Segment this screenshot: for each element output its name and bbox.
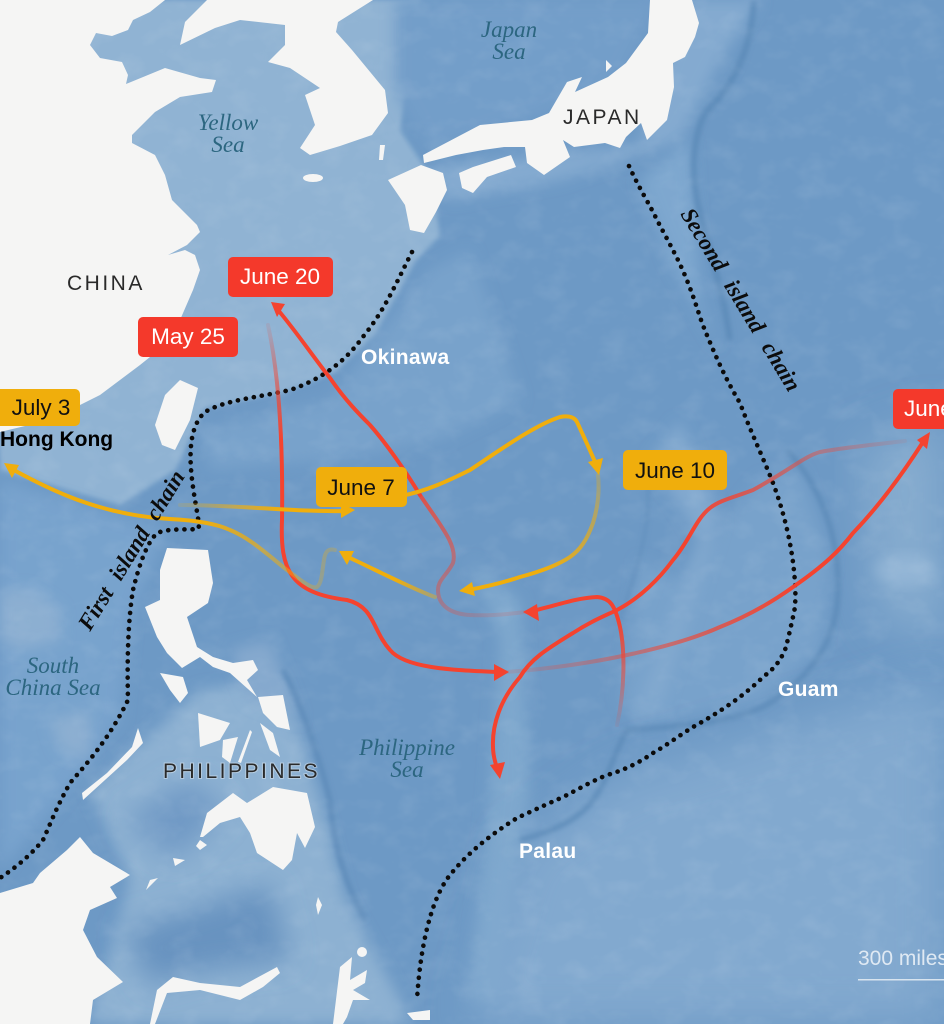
landmass: Taiwan <box>155 380 198 450</box>
tag: June 20: June 20 <box>240 264 320 289</box>
tag: June 7: June 7 <box>327 475 395 500</box>
sea labels: Sea <box>492 39 526 64</box>
label: second island chain: Second island chain <box>676 204 806 396</box>
landmass: Indonesia islands <box>150 897 430 1024</box>
tag: June 10: June 10 <box>635 458 715 483</box>
red route: May 25 <box>268 325 930 681</box>
tag: June (cropped at right edge) <box>893 389 944 429</box>
sea labels: South <box>27 653 79 678</box>
country labels: CHINA <box>67 272 145 295</box>
sea labels: Sea <box>390 757 424 782</box>
yellow route: June 7 to June 10 <box>180 416 603 518</box>
sea labels <box>5 17 537 782</box>
sea labels: China Sea <box>5 675 101 700</box>
island labels: Okinawa <box>361 346 449 369</box>
sea labels: Philippine <box>358 735 455 760</box>
sea labels: Japan <box>481 17 537 42</box>
red route: June 20 <box>271 302 905 779</box>
landmass: Korea and Manchuria <box>180 0 388 155</box>
tag: July 3 <box>0 389 80 426</box>
label: first island chain: First island chain <box>72 466 190 635</box>
island labels: Guam <box>778 678 839 701</box>
tag: June 20 <box>228 257 333 297</box>
tag: July 3: July 3 <box>12 395 70 420</box>
tag: June 10 <box>623 450 727 490</box>
landmass: Japan <box>303 0 699 233</box>
island labels: Palau <box>519 840 577 863</box>
country labels: JAPAN <box>563 106 642 129</box>
first island chain <box>0 252 412 878</box>
tag: May 25: May 25 <box>151 324 225 349</box>
yellow route: June 10 to Hong Kong <box>4 463 599 597</box>
sea labels: Sea <box>211 132 245 157</box>
island labels <box>361 346 839 863</box>
landmass: Borneo <box>0 837 130 1024</box>
second island chain <box>417 166 795 1000</box>
tag: June 7 <box>316 467 407 507</box>
label: Hong Kong: Hong Kong <box>0 428 113 451</box>
country labels <box>67 106 642 783</box>
landmass: Philippines <box>82 548 315 890</box>
tag: May 25 <box>138 317 238 357</box>
sea labels: Yellow <box>198 110 259 135</box>
scale bar: 300 miles <box>858 947 944 980</box>
country labels: PHILIPPINES <box>163 760 320 783</box>
landmass: China <box>0 0 216 432</box>
